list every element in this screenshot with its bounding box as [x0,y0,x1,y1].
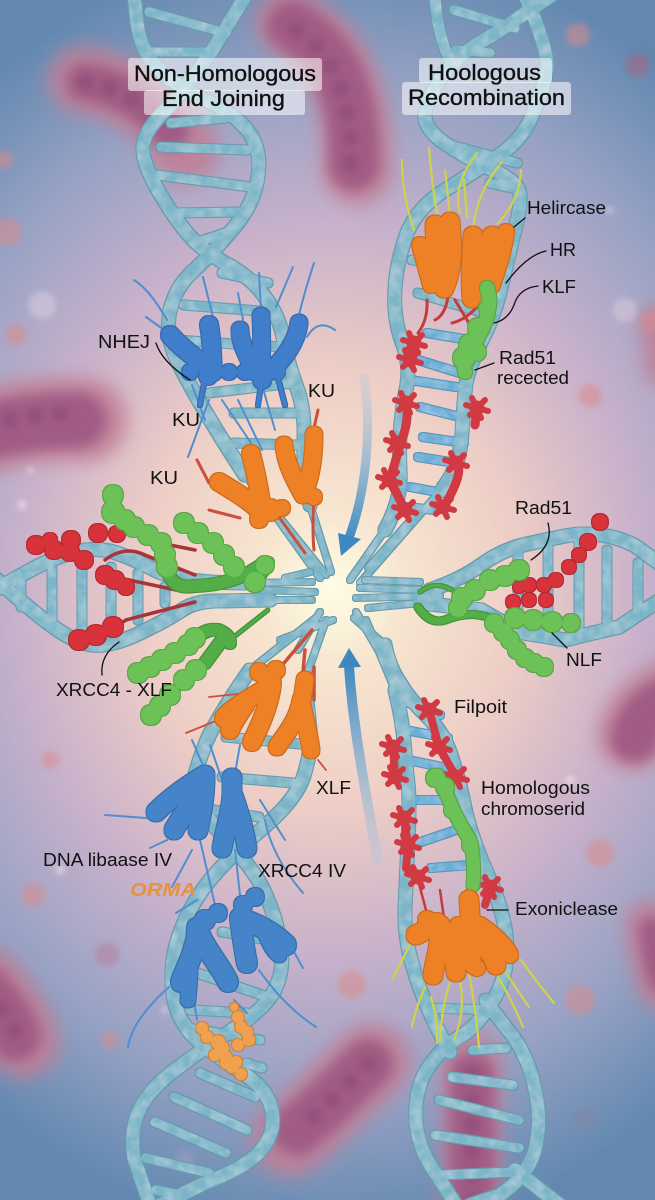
orange Y complexes [219,435,322,528]
red tails [197,410,318,553]
blue filament threads [105,740,316,1047]
label: Filpoit: Filpoit [454,697,507,717]
label: Rad51 recected: recected [497,368,569,388]
label: KU upper right: KU [308,381,335,401]
label: orange smudged text: ORMA [130,880,196,900]
title line: End Joining: End Joining [162,86,285,111]
protein group: KU orange top [197,410,322,553]
title line: Recombination: Recombination [408,85,565,110]
green chains [102,485,274,592]
label: Rad51 recected [497,348,569,388]
arrow: top, pointing to centre [338,377,368,556]
blue Y complexes [170,316,299,405]
protein group: left green and red [27,485,274,725]
blue filament threads [134,263,335,457]
red chain of spiky proteins [378,333,488,520]
label: Homologous chromoserid: chromoserid [481,799,585,819]
label: DNA libaase IV: DNA libaase IV [43,850,172,870]
protein group: XLF orange bottom [186,630,326,770]
label: Homologous chromoserid: Homologous [481,778,590,798]
lower green chains [128,610,268,725]
DNA helix: top right [350,0,552,583]
orange Y complexes [420,222,506,298]
protein group: XRCC4 blue bottom [105,740,316,1047]
label: XRCC4 - XLF: XRCC4 - XLF [56,680,172,700]
label: KU middle: KU [172,410,200,430]
title line: Hoologous: Hoologous [428,60,541,85]
title box: Non-Homologous End Joining [128,58,322,115]
label: NHEJ: NHEJ [98,332,150,352]
protein group: NHEJ blue top [134,263,335,457]
label: XRCC4 IV: XRCC4 IV [258,861,346,881]
yellow threads [402,148,521,230]
red tails [105,545,195,627]
yellow threads [393,940,554,1047]
label: HR: HR [550,240,576,260]
label: Rad51: Rad51 [515,498,572,518]
label: Helircase: Helircase [527,198,606,218]
protein group: bottom right exonuclease [382,700,554,1047]
green chains [418,560,580,676]
label: Rad51 recected: Rad51 [499,348,556,368]
DNA helix: left horizontal [0,550,315,645]
centre glow [263,520,403,660]
DNA helix: right horizontal [356,534,655,640]
orange Y complexes [224,661,311,750]
green chain [426,769,478,885]
arrow: bottom, pointing to centre [338,648,378,862]
label: KLF: KLF [542,277,576,297]
red tails [284,630,314,700]
leader lines [102,218,567,910]
red chain of spiky proteins [382,700,501,925]
protein group: right horizontal [418,514,608,676]
title box: Hoologous Recombination [402,58,571,115]
red chains [27,524,134,650]
blue Y complexes [156,775,286,1000]
title line: Non-Homologous: Non-Homologous [134,61,316,86]
red chain [506,514,608,609]
label: KU lower: KU [150,468,178,488]
orange Y complexes [416,900,510,975]
label: Exoniclease: Exoniclease [515,899,618,919]
orange small cluster [196,1003,255,1080]
label: XLF: XLF [316,778,351,798]
protein group: top right helicase [378,148,521,520]
DNA helix: bottom right [354,612,560,1200]
red threads [418,297,477,333]
green chain [453,288,495,372]
DNA helix: top left [134,0,331,578]
DNA helix: bottom left [133,612,333,1200]
label: NLF: NLF [566,650,602,670]
label: Homologous chromoserid [481,778,590,819]
